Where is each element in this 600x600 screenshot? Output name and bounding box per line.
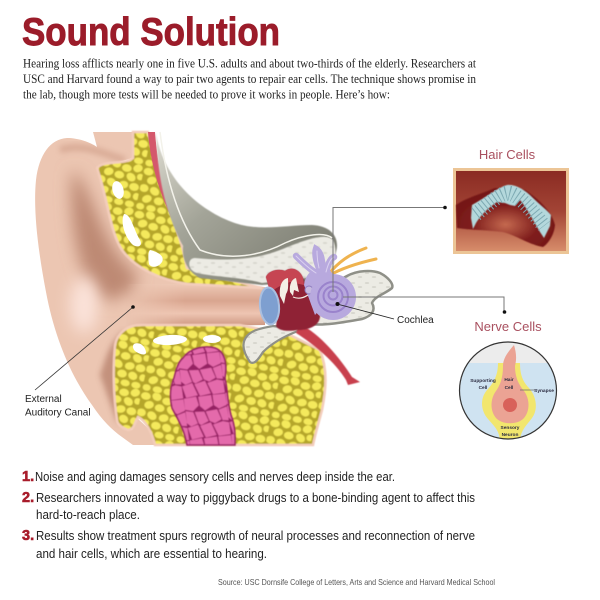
middle ear cavity xyxy=(266,269,320,331)
outline xyxy=(460,342,556,439)
upper fat tissue xyxy=(97,132,262,288)
right temporal bone xyxy=(310,271,392,325)
cell labels: Cell xyxy=(505,385,513,391)
lower fat voids xyxy=(133,334,221,354)
ossicles xyxy=(280,278,312,304)
cell labels: Neuron xyxy=(502,432,518,438)
step 3: Results show treatment spurs regrowth of neural processes and reconnection of nerve xyxy=(36,529,475,543)
step 2: 2. xyxy=(22,490,34,506)
cell labels: Supporting xyxy=(470,378,496,384)
step 2: Researchers innovated a way to piggyback drugs to a bone-binding agent to affect this xyxy=(36,491,475,505)
leader line: nerve cells xyxy=(343,297,506,314)
intro text: the lab, though more tests will be needed to prove it works in people. Here’s how: xyxy=(23,86,390,102)
intro text xyxy=(23,56,476,102)
step 2: hard-to-reach place. xyxy=(36,508,140,522)
step 1: Noise and aging damages sensory cells and nerves deep inside the ear. xyxy=(35,470,395,484)
heading: nerve cells: Nerve Cells xyxy=(474,319,542,334)
hair cell xyxy=(492,345,528,423)
heading: hair cells: Hair Cells xyxy=(479,147,536,162)
label: cochlea: Cochlea xyxy=(397,315,434,326)
meninges stripe xyxy=(148,132,175,219)
synapse line xyxy=(520,389,535,391)
step 3: 3. xyxy=(22,528,34,544)
label: external auditory canal: Auditory Canal xyxy=(25,408,91,418)
eardrum xyxy=(258,287,281,325)
ear diagram xyxy=(30,130,506,450)
intro text: USC and Harvard found a way to pair two agents to repair ear cells. The technique shows promise in xyxy=(23,71,476,86)
cochlea xyxy=(310,274,356,320)
label: external auditory canal: External xyxy=(25,394,62,405)
outer ear and canal xyxy=(30,130,270,450)
cell labels: Synapse xyxy=(534,388,554,394)
fat tissue voids xyxy=(110,180,163,267)
leader line: external auditory canal xyxy=(35,305,135,390)
leader line: cochlea xyxy=(336,302,394,319)
eustachian tube xyxy=(296,324,360,385)
step 2 xyxy=(22,490,475,522)
nucleus xyxy=(503,398,517,412)
step 3 xyxy=(22,528,475,561)
round window xyxy=(305,286,313,294)
cell labels xyxy=(470,377,554,438)
cell labels: Sensory xyxy=(501,425,520,431)
step 3: and hair cells, which are essential to hearing. xyxy=(36,547,267,561)
hair cells image xyxy=(454,170,568,252)
hair cell bundle xyxy=(471,185,551,238)
title: Sound Solution xyxy=(22,11,280,54)
vestibular canals xyxy=(296,249,340,315)
temporal bone xyxy=(189,237,336,283)
cell labels: Cell xyxy=(479,385,487,391)
label: external auditory canal xyxy=(25,394,91,418)
source: Source: USC Dornsife College of Letters, Arts and Science and Harvard Medical School xyxy=(218,577,495,587)
lower temporal bone xyxy=(243,326,300,363)
cell labels: Hair xyxy=(504,377,514,383)
leader line: hair cells xyxy=(333,206,447,292)
panel: hair cells xyxy=(454,147,568,252)
step 1: 1. xyxy=(22,469,34,485)
grey brain tissue xyxy=(156,132,337,285)
panel: nerve cells xyxy=(458,322,558,440)
auditory nerves xyxy=(328,248,376,276)
steps list xyxy=(22,469,475,561)
yellow sheath xyxy=(482,363,536,440)
white membrane line xyxy=(160,132,332,256)
nerve cell diagram xyxy=(458,341,558,440)
parotid gland xyxy=(171,347,235,445)
tissue blob xyxy=(456,188,555,247)
intro text: Hearing loss afflicts nearly one in five U.S. adults and about two-thirds of the elderly. Researchers at xyxy=(23,56,476,70)
lower fat tissue xyxy=(114,325,326,445)
